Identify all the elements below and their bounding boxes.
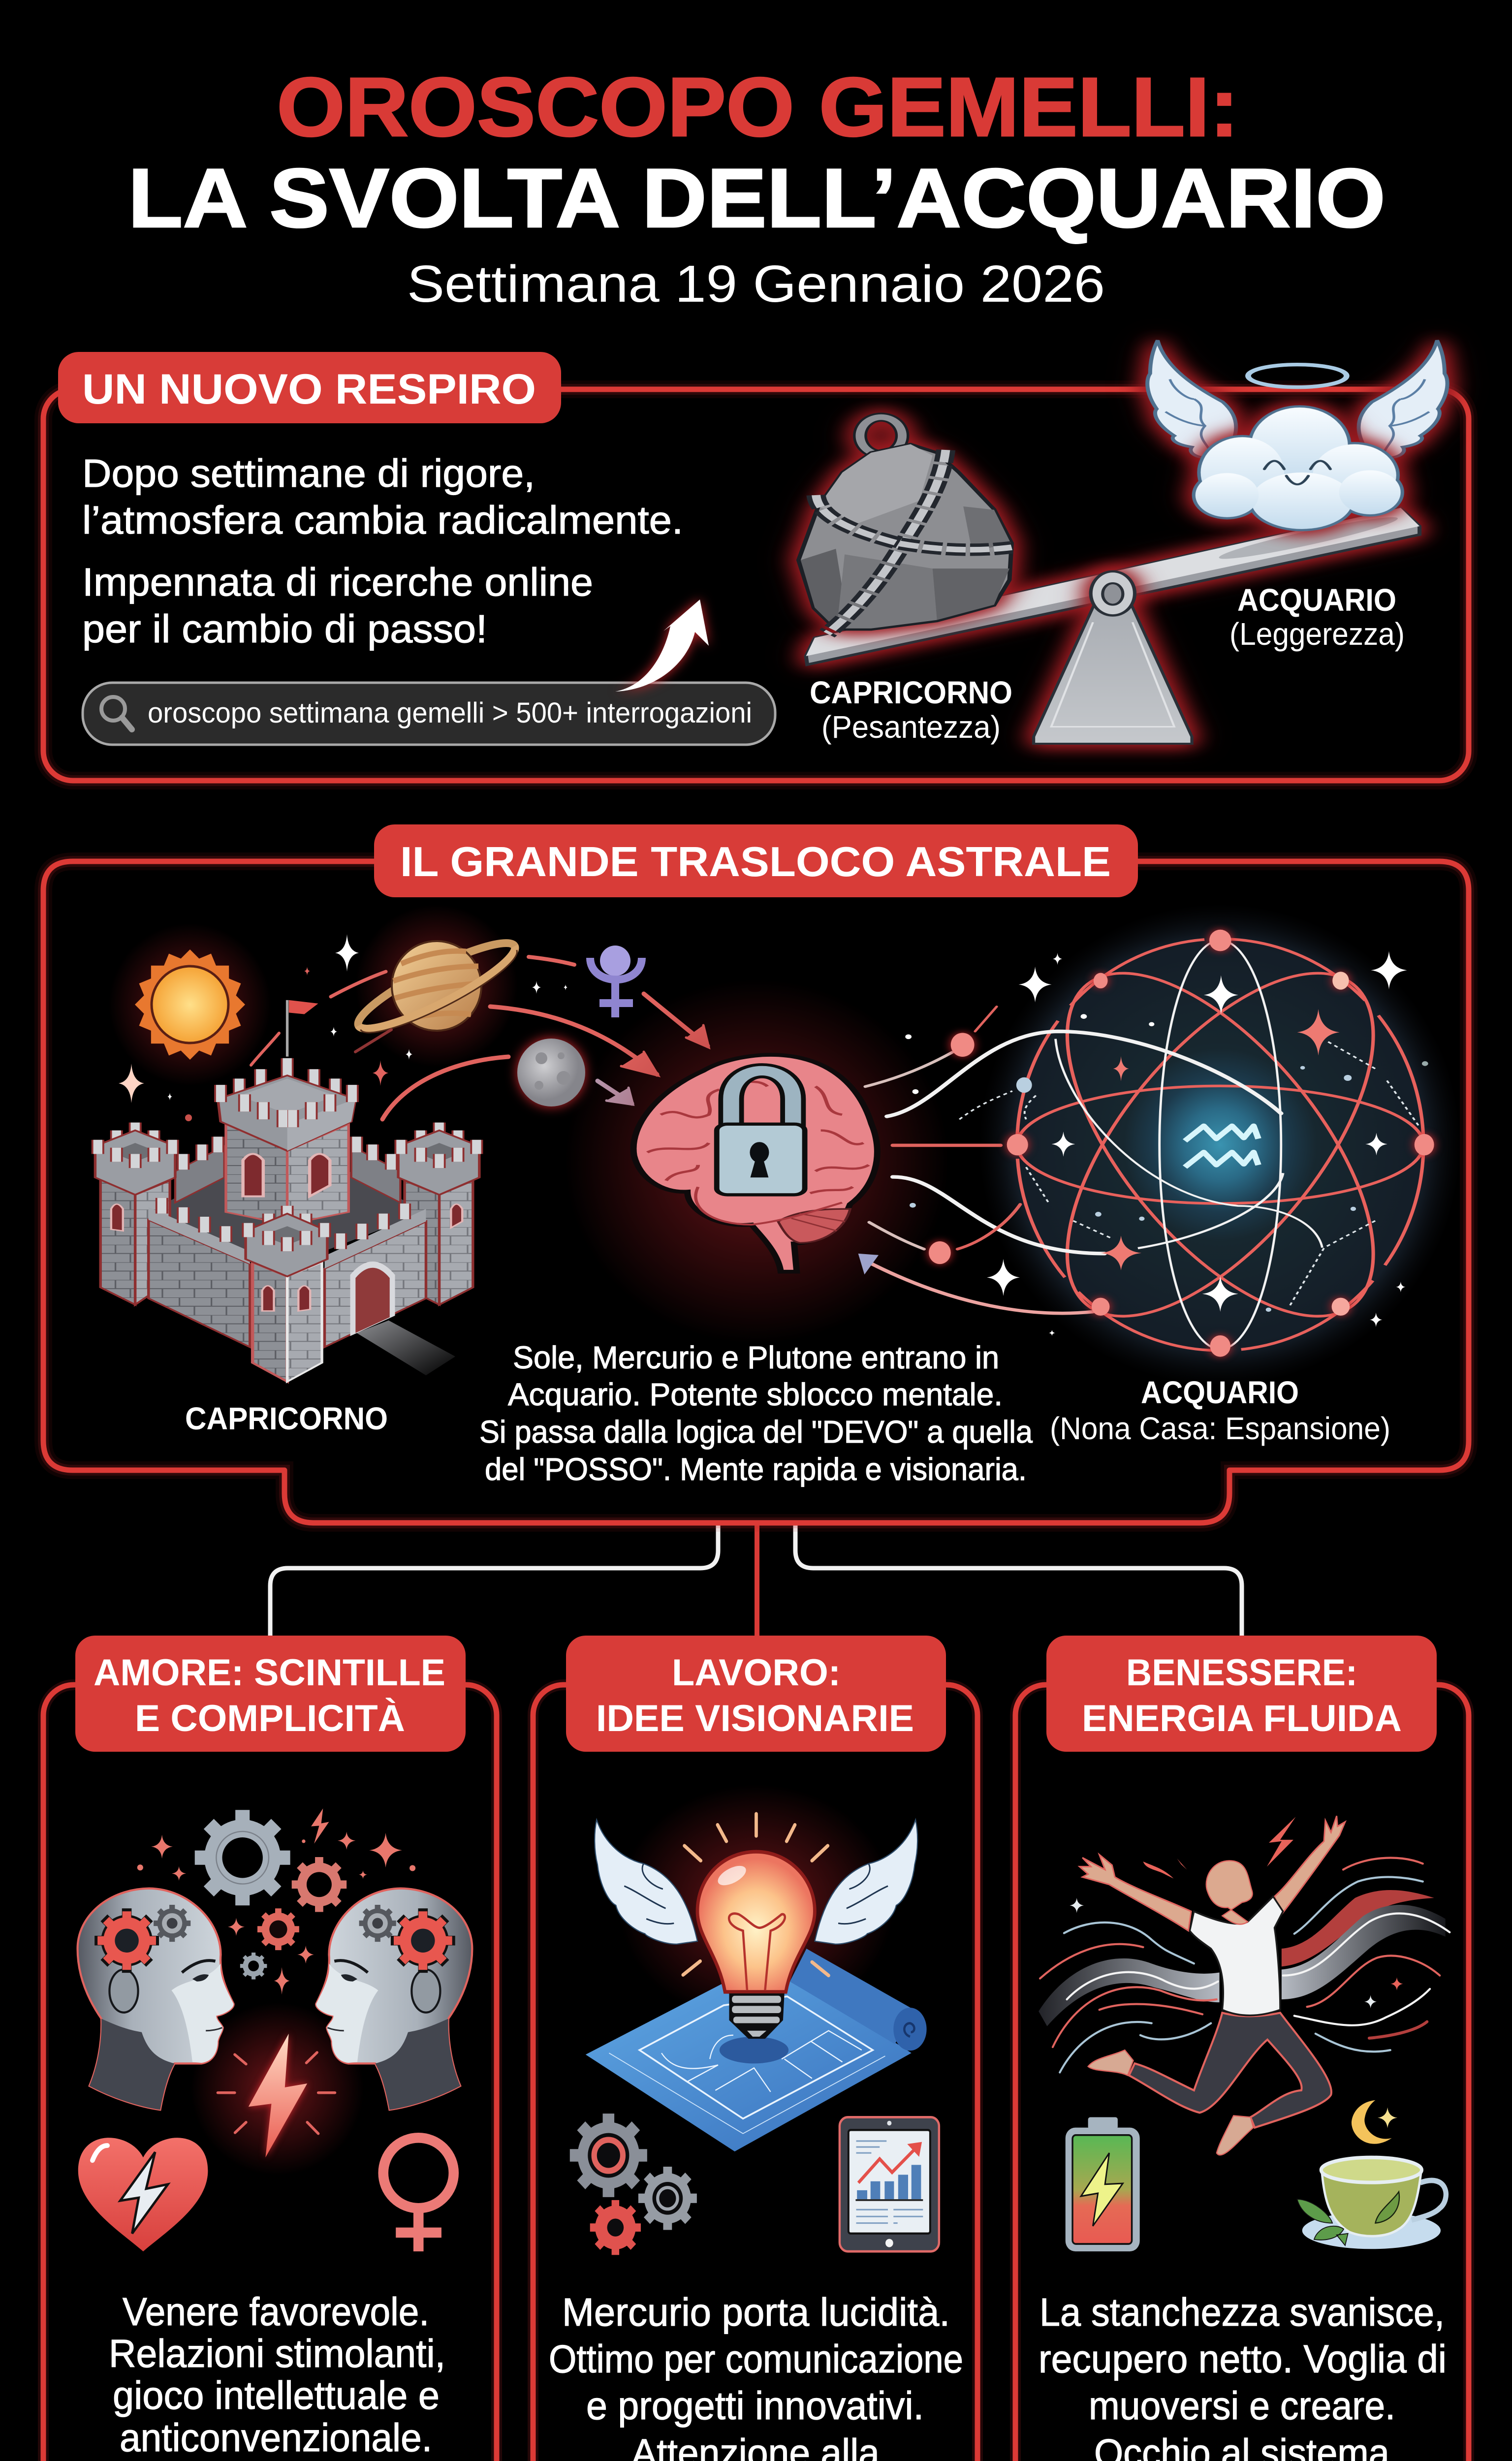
search bar: oroscopo settimana gemelli > 500+ interrogazioni bbox=[148, 697, 752, 729]
blueprint bbox=[586, 1949, 927, 2151]
panel border bbox=[533, 1685, 977, 2461]
label: capricorno: (Pesantezza) bbox=[821, 709, 1001, 745]
label: acquario: (Leggerezza) bbox=[1229, 616, 1405, 652]
heading badge bbox=[1046, 1636, 1437, 1752]
left corner tower bbox=[95, 1123, 175, 1305]
sphere sparkles bbox=[905, 951, 1428, 1336]
text: benessere: muoversi e creare. bbox=[1089, 2384, 1395, 2428]
intro text bbox=[82, 451, 683, 651]
intro text: per il cambio di passo! bbox=[82, 607, 487, 651]
illustration: winged bulb and blueprint bbox=[570, 1785, 939, 2255]
text: amore: Venere favorevole. bbox=[123, 2290, 429, 2334]
front left wall bbox=[149, 1198, 250, 1347]
right head bbox=[316, 1889, 472, 2110]
cloud bbox=[1196, 408, 1401, 529]
energy streams bbox=[865, 1007, 1281, 1313]
bolt glow bbox=[191, 2002, 364, 2176]
icon: pluto symbol bbox=[590, 946, 642, 1017]
legs bbox=[1129, 2013, 1331, 2128]
bulb glow bbox=[618, 1785, 894, 2023]
left arm bbox=[1079, 1855, 1191, 1931]
arrows: planets into brain bbox=[251, 957, 709, 1119]
panel border bbox=[43, 861, 1469, 1523]
panel border bbox=[43, 1685, 497, 2461]
text: lavoro: Mercurio porta lucidità. bbox=[562, 2290, 950, 2334]
text: amore: Relazioni stimolanti, bbox=[109, 2332, 445, 2375]
halo bbox=[1248, 365, 1347, 387]
tea cup bbox=[1297, 2157, 1446, 2249]
text: lavoro bbox=[549, 2290, 963, 2461]
arrow head into brain bbox=[858, 1254, 879, 1274]
bulb bbox=[697, 1852, 815, 2039]
gears bbox=[570, 2114, 697, 2255]
orbits bbox=[959, 939, 1435, 1351]
wings bbox=[595, 1820, 917, 1944]
back wall merlons bbox=[183, 1136, 391, 1169]
lightning and accents bbox=[1143, 1817, 1403, 1990]
illustration: jumping person bbox=[1039, 1816, 1449, 2251]
label: acquario: (Nona Casa: Espansione) bbox=[1050, 1411, 1390, 1446]
panel: lavoro bbox=[533, 1636, 977, 2461]
panel border bbox=[1015, 1685, 1469, 2461]
seesaw beam bbox=[806, 508, 1419, 664]
heading badge: IL GRANDE TRASLOCO ASTRALE bbox=[400, 839, 1111, 885]
castle road bbox=[357, 1321, 455, 1375]
panel: benessere bbox=[1015, 1636, 1469, 2461]
description text: Sole, Mercurio e Plutone entrano in bbox=[513, 1340, 999, 1375]
icon: moon bbox=[517, 1039, 585, 1106]
panel border bbox=[43, 389, 1469, 781]
sparkles bbox=[1070, 1898, 1377, 2008]
label: acquario bbox=[1050, 1375, 1390, 1446]
description text: Acquario. Potente sblocco mentale. bbox=[508, 1377, 1003, 1412]
panel: il grande trasloco astrale bbox=[43, 824, 1469, 1523]
heading badge: UN NUOVO RESPIRO bbox=[82, 366, 536, 413]
panel: amore bbox=[43, 1636, 497, 2461]
winged cloud bbox=[1147, 340, 1448, 529]
heading badge bbox=[374, 824, 1138, 897]
text: lavoro: e progetti innovativi. bbox=[586, 2384, 924, 2428]
title line 1: OROSCOPO GEMELLI: bbox=[277, 61, 1239, 154]
text: amore: gioco intellettuale e bbox=[113, 2373, 440, 2417]
floating gears bbox=[195, 1810, 346, 1979]
heading badge: IDEE VISIONARIE bbox=[596, 1698, 914, 1739]
front tower bbox=[246, 1206, 327, 1382]
decorative sparkles: sky bbox=[119, 934, 567, 1121]
heading badge: E COMPLICITÀ bbox=[135, 1698, 405, 1739]
front right wall bbox=[324, 1203, 426, 1347]
heading badge bbox=[75, 1636, 466, 1752]
tablet chart bbox=[840, 2117, 939, 2251]
sparkles bbox=[137, 1808, 415, 1994]
sphere nodes bbox=[929, 930, 1434, 1357]
icon: magnifier bbox=[101, 697, 132, 729]
panel: un nuovo respiro bbox=[43, 340, 1469, 781]
flag bbox=[286, 1000, 288, 1057]
lightning bolt bbox=[218, 2034, 335, 2157]
label: acquario: ACQUARIO bbox=[1141, 1375, 1299, 1410]
icon: aquarius sphere bbox=[858, 904, 1461, 1386]
label: capricorno: CAPRICORNO bbox=[810, 675, 1012, 710]
icon: brain with padlock bbox=[565, 979, 949, 1344]
courtyard bbox=[149, 1171, 426, 1265]
head bbox=[1206, 1861, 1253, 1925]
label: capricorno: CAPRICORNO bbox=[185, 1401, 388, 1436]
energy waves bbox=[1039, 1858, 1449, 2073]
title bbox=[128, 61, 1386, 313]
torso bbox=[1190, 1896, 1283, 2016]
castle door bbox=[350, 1262, 395, 1336]
left head bbox=[78, 1889, 234, 2110]
wings bbox=[1147, 340, 1448, 458]
intro text: l’atmosfera cambia radicalmente. bbox=[82, 498, 683, 542]
label: acquario: ACQUARIO bbox=[1237, 582, 1396, 618]
aquarius glyph bbox=[1185, 1126, 1259, 1167]
text: benessere: La stanchezza svanisce, bbox=[1040, 2290, 1445, 2334]
crescent moon bbox=[1352, 2100, 1397, 2144]
label: capricorno bbox=[810, 675, 1012, 745]
brain bbox=[633, 1055, 877, 1272]
search bar bbox=[83, 683, 775, 745]
heading badge: AMORE: SCINTILLE bbox=[94, 1652, 445, 1694]
rays bbox=[683, 1814, 828, 1976]
right corner tower bbox=[398, 1123, 479, 1305]
heading badge: LAVORO: bbox=[672, 1652, 841, 1694]
connectors between panels bbox=[270, 1523, 1242, 1639]
description text: del "POSSO". Mente rapida e visionaria. bbox=[485, 1451, 1027, 1487]
seesaw fulcrum bbox=[1034, 571, 1192, 744]
intro text: Impennata di ricerche online bbox=[82, 560, 593, 604]
right arm bbox=[1274, 1816, 1345, 1914]
feet bbox=[1088, 2050, 1133, 2076]
arrow: upward trend bbox=[615, 599, 709, 692]
heading badge bbox=[566, 1636, 946, 1752]
label: acquario bbox=[1229, 582, 1405, 652]
intro text: Dopo settimane di rigore, bbox=[82, 451, 535, 495]
illustration: minds in sync bbox=[78, 1808, 472, 2251]
padlock bbox=[717, 1071, 805, 1195]
person bbox=[1079, 1816, 1345, 2155]
chained rock bbox=[798, 417, 1011, 633]
description text bbox=[479, 1340, 1033, 1487]
heading badge: BENESSERE: bbox=[1126, 1652, 1357, 1694]
text: benessere: recupero netto. Voglia di bbox=[1039, 2337, 1447, 2381]
text: lavoro: Ottimo per comunicazione bbox=[549, 2337, 963, 2381]
icon: seesaw with rock and cloud bbox=[798, 340, 1448, 744]
back wall left bbox=[175, 1146, 224, 1202]
venus symbol bbox=[383, 2138, 454, 2251]
text: amore bbox=[106, 2290, 446, 2461]
icon: castle bbox=[95, 1000, 479, 1382]
battery bbox=[1066, 2117, 1140, 2251]
central tower bbox=[218, 1058, 355, 1225]
heading badge bbox=[58, 352, 561, 423]
title line 2: LA SVOLTA DELL’ACQUARIO bbox=[128, 152, 1386, 245]
back wall right bbox=[351, 1146, 400, 1202]
description text: Si passa dalla logica del "DEVO" a quella bbox=[479, 1414, 1033, 1450]
heading badge: ENERGIA FLUIDA bbox=[1082, 1698, 1402, 1739]
subtitle: Settimana 19 Gennaio 2026 bbox=[407, 255, 1105, 313]
heart bbox=[78, 2138, 208, 2251]
icon: saturn bbox=[350, 905, 525, 1067]
icon: sun bbox=[109, 923, 271, 1086]
text: benessere bbox=[1039, 2290, 1447, 2461]
text: amore: anticonvenzionale. bbox=[120, 2416, 432, 2460]
